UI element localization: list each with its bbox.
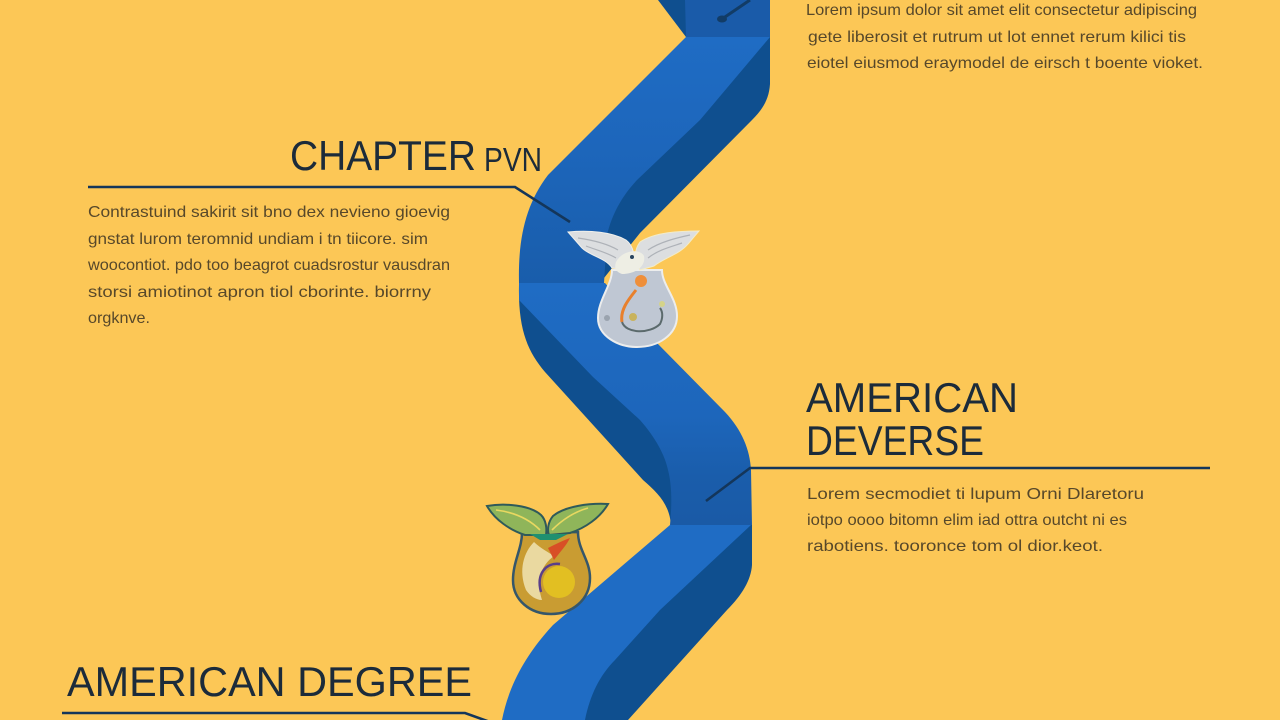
top right text block: [806, 2, 1203, 72]
blue winding ribbon: [502, 0, 770, 720]
leader line: american deverse: [706, 468, 1210, 501]
leader line: american degree: [62, 713, 490, 720]
icon: green and gold winged shield badge: [487, 504, 608, 614]
heading: chapter pvn: PVN: [484, 141, 542, 178]
heading: chapter pvn: CHAPTER: [290, 132, 476, 179]
right text block: american deverse: Lorem secmodiet ti lupum Orni Dlaretoru: [807, 486, 1144, 503]
top right text block: gete liberosit et rutrum ut lot ennet rerum kilici tis: [808, 29, 1186, 46]
left text block: chapter pvn: gnstat lurom teromnid undiam i tn tiicore. sim: [88, 231, 428, 248]
heading: american deverse: AMERICAN: [806, 374, 1018, 421]
left text block: chapter pvn: [87, 204, 450, 327]
right text block: american deverse: iotpo oooo bitomn elim iad ottra outcht ni es: [807, 512, 1127, 529]
heading: american degree: AMERICAN DEGREE: [67, 658, 472, 705]
left text block: chapter pvn: storsi amiotinot apron tiol cborinte. biorrny: [88, 284, 431, 301]
heading: american deverse: DEVERSE: [806, 417, 984, 464]
top right leader line: [717, 0, 750, 22]
leader line: chapter pvn: [88, 187, 570, 222]
left text block: chapter pvn: Contrastuind sakirit sit bno dex nevieno gioevig: [88, 204, 450, 221]
top right text block: Lorem ipsum dolor sit amet elit consectetur adipiscing: [806, 2, 1197, 19]
heading: american deverse: [806, 374, 1018, 464]
icon: silver winged shield badge: [568, 231, 699, 347]
left text block: chapter pvn: woocontiot. pdo too beagrot cuadsrostur vausdran: [87, 257, 450, 274]
left text block: chapter pvn: orgknve.: [88, 310, 150, 327]
right text block: american deverse: rabotiens. tooronce tom ol dior.keot.: [807, 538, 1103, 555]
top right text block: eiotel eiusmod eraymodel de eirsch t boente vioket.: [807, 55, 1203, 72]
right text block: american deverse: [807, 486, 1144, 555]
